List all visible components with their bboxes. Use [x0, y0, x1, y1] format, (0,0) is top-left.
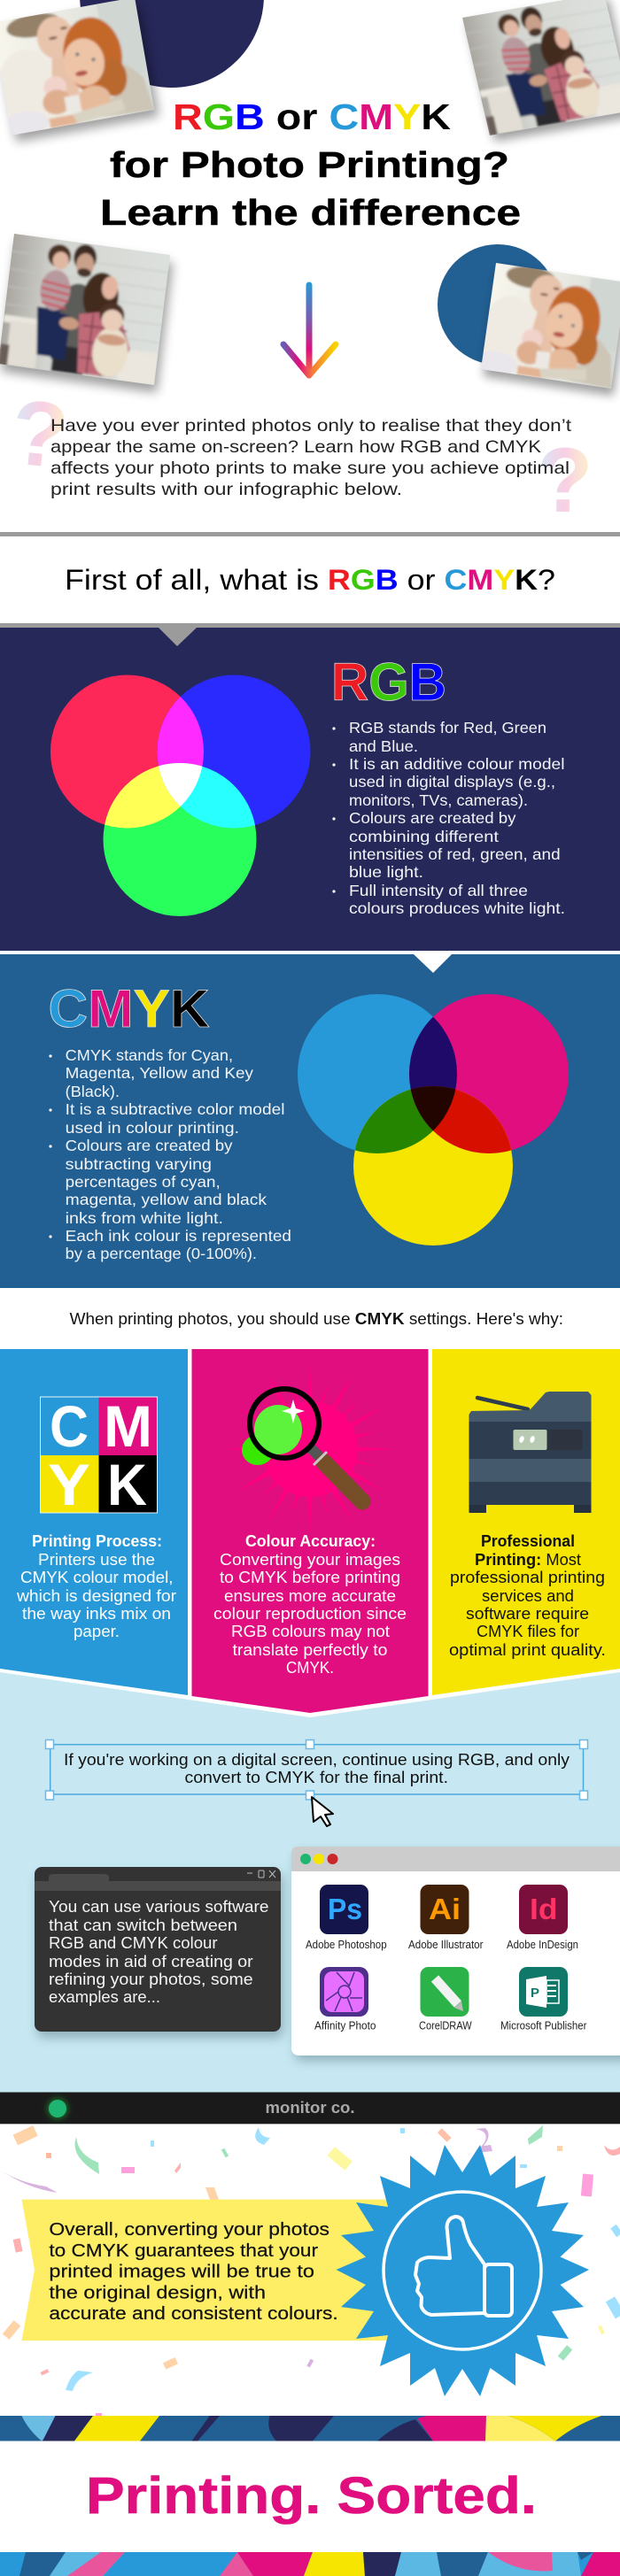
text: colour accuracy	[213, 1532, 407, 1677]
intro paragraph: Have you ever printed photos only to realise that they don’t	[50, 416, 572, 436]
icon: CMYK tile: Y	[48, 1452, 90, 1517]
text: professional printing: optimal print quality.	[449, 1641, 606, 1659]
icon: Adobe Illustrator: Ai	[429, 1893, 461, 1925]
text: printing process: the way inks mix on	[22, 1605, 171, 1623]
CMYK bullet list: Each ink colour is represented	[66, 1227, 291, 1245]
icon: Adobe Illustrator	[420, 1885, 469, 1934]
closing slogan: Printing. Sorted.	[86, 2467, 537, 2525]
RGB bullet list: and Blue.	[349, 737, 418, 755]
callout: selection box with digital screen note: If you're working on a digital screen, continue using RGB, and only	[64, 1751, 570, 1769]
RGB bullet list	[332, 719, 565, 917]
text: printing process: which is designed for	[16, 1587, 176, 1605]
icon: CMYK tile: K	[107, 1452, 147, 1517]
callout: selection box with digital screen note: convert to CMYK for the final print.	[184, 1769, 448, 1786]
text: software intro: RGB and CMYK colour	[49, 1934, 218, 1952]
text: conclusion: accurate and consistent colours.	[49, 2304, 338, 2324]
text: colour accuracy: to CMYK before printing	[220, 1569, 400, 1586]
photo: mother and daughter, right	[470, 259, 620, 396]
text: professional printing: Professional	[481, 1532, 575, 1550]
colour band bottom	[0, 2552, 620, 2576]
CMYK bullet list: CMYK stands for Cyan,	[66, 1046, 233, 1064]
CMYK bullet list: percentages of cyan,	[66, 1173, 221, 1191]
icon: window controls	[247, 1870, 275, 1878]
callout: selection box with digital screen note	[46, 1740, 588, 1800]
confetti	[0, 2125, 620, 2416]
text: conclusion: to CMYK guarantees that your	[49, 2241, 318, 2261]
title: RGB or CMYK	[173, 96, 451, 137]
RGB bullet list: used in digital displays (e.g.,	[349, 773, 555, 791]
CMYK bullet list: used in colour printing.	[66, 1119, 239, 1137]
text: conclusion: the original design, with	[49, 2284, 266, 2303]
text: printing process: Printers use the	[38, 1551, 155, 1569]
CMYK bullet list: Colours are created by	[66, 1137, 233, 1154]
text: colour accuracy: CMYK.	[286, 1659, 334, 1677]
heading: CMYK: CMYK	[48, 979, 209, 1038]
chart: additive RGB venn	[50, 675, 310, 916]
photo: mother and daughter, top left	[0, 0, 159, 144]
text: professional printing: professional printing	[450, 1569, 605, 1586]
CMYK bullet list: by a percentage (0-100%).	[66, 1245, 257, 1262]
icon: pale question mark left: ?	[6, 381, 73, 489]
heading: RGB: RGB	[331, 652, 446, 712]
text: professional printing: software require	[466, 1605, 589, 1623]
panel: light blue software background	[0, 1672, 620, 2093]
CMYK bullet list: magenta, yellow and black	[66, 1191, 267, 1208]
text: colour accuracy: ensures more accurate	[224, 1587, 396, 1605]
monitor bezel bar	[0, 2093, 620, 2125]
text: professional printing	[449, 1532, 606, 1659]
icon: thumbs up in ring	[384, 2192, 541, 2349]
RGB bullet list: blue light.	[349, 863, 423, 881]
text: colour accuracy: RGB colours may not	[231, 1623, 390, 1640]
app labels: CorelDRAW	[419, 2020, 472, 2032]
intro paragraph: appear the same on-screen? Learn how RGB and CMYK	[50, 437, 541, 457]
pointer triangle	[159, 628, 197, 646]
decorative blue circle	[438, 244, 558, 365]
app labels: Adobe Illustrator	[408, 1939, 484, 1951]
text: conclusion: printed images will be true to	[49, 2263, 314, 2282]
text: professional printing: services and	[482, 1587, 574, 1605]
heading: first of all: First of all, what is RGB or CMYK?	[65, 564, 555, 596]
app labels: Adobe InDesign	[507, 1939, 578, 1951]
icon: CMYK tile: C	[50, 1393, 89, 1459]
text: software intro	[49, 1898, 269, 2006]
title: Learn the difference	[100, 192, 521, 233]
icon: office printer	[469, 1392, 592, 1513]
panel: dark window	[35, 1867, 283, 2038]
CMYK bullet list: It is a subtractive color model	[66, 1100, 285, 1118]
text: professional printing: CMYK files for	[477, 1623, 579, 1640]
app labels: Affinity Photo	[314, 2020, 376, 2032]
photo: family, left	[0, 231, 174, 392]
text: printing process: Printing Process:	[32, 1532, 162, 1550]
text: printing process: CMYK colour model,	[20, 1569, 174, 1586]
text: colour accuracy: Colour Accuracy:	[245, 1532, 376, 1550]
icon: Affinity Photo	[320, 1967, 368, 2017]
RGB bullet list: Full intensity of all three	[349, 882, 528, 899]
panel: RGB	[0, 623, 620, 951]
RGB bullet list: colours produces white light.	[349, 899, 565, 917]
arrow: gradient down arrow	[283, 285, 336, 375]
colour band top	[0, 2416, 620, 2441]
intro paragraph: print results with our infographic below.	[50, 480, 402, 499]
text: colour accuracy: colour reproduction since	[213, 1605, 407, 1623]
RGB bullet list: RGB stands for Red, Green	[349, 719, 546, 737]
text: printing process: paper.	[74, 1623, 120, 1640]
icon: CMYK tile: M	[104, 1393, 152, 1459]
icon: CMYK tile	[41, 1393, 158, 1517]
panel: software app window	[291, 1847, 620, 2061]
section: conclusion	[0, 2125, 620, 2416]
text: software intro: refining your photos, some	[49, 1971, 253, 1988]
CMYK bullet list: Magenta, Yellow and Key	[66, 1064, 253, 1082]
app labels: Adobe Photoshop	[306, 1939, 387, 1951]
text: software intro: You can use various software	[49, 1898, 269, 1916]
text: colour accuracy: Converting your images	[220, 1551, 400, 1569]
icon: pale question mark right: ?	[537, 429, 593, 532]
yellow banner	[21, 2200, 399, 2341]
intro paragraph	[50, 416, 572, 499]
power LED	[48, 2099, 67, 2118]
icon: CorelDRAW	[420, 1967, 469, 2017]
section: intro header	[0, 0, 620, 532]
CMYK bullet list: inks from white light.	[66, 1209, 223, 1227]
title	[100, 96, 521, 233]
text: printing process	[16, 1532, 176, 1640]
icon: Adobe InDesign	[519, 1885, 568, 1934]
text: professional printing: Printing: Most	[475, 1551, 581, 1569]
blue starburst badge	[337, 2145, 589, 2396]
panel: printing process column	[0, 1349, 188, 1695]
text: conclusion	[49, 2220, 338, 2324]
intro paragraph: affects your photo prints to make sure you achieve optimal	[50, 459, 570, 478]
app labels: Microsoft Publisher	[500, 2020, 586, 2032]
divider bar top	[0, 532, 620, 536]
photo: family, top right	[460, 0, 620, 143]
window dots	[300, 1854, 338, 1864]
RGB bullet list: intensities of red, green, and	[349, 845, 561, 863]
panel: professional printing column	[432, 1349, 620, 1695]
icon: Microsoft Publisher	[519, 1967, 568, 2017]
icon: magnifying glass with burst	[225, 1364, 395, 1534]
icon: Adobe Photoshop	[320, 1885, 368, 1934]
text: software intro: examples are...	[49, 1988, 160, 2006]
CMYK bullet list	[49, 1046, 291, 1262]
monitor brand: monitor co.	[266, 2099, 354, 2117]
icon: mouse cursor	[312, 1797, 333, 1826]
icon: Adobe Photoshop: Ps	[328, 1893, 362, 1925]
text: when printing photos: When printing photos, you should use CMYK settings. Here's why:	[70, 1309, 563, 1328]
text: conclusion: Overall, converting your photos	[49, 2220, 329, 2240]
RGB bullet list: monitors, TVs, cameras).	[349, 791, 528, 809]
CMYK bullet list: subtracting varying	[66, 1155, 212, 1173]
decorative navy circle	[80, 0, 264, 88]
app labels	[306, 1939, 586, 2032]
pointer triangle	[414, 954, 452, 973]
icon: Microsoft Publisher: P	[531, 1986, 539, 2001]
RGB bullet list: Colours are created by	[349, 809, 516, 827]
panel: CMYK	[0, 954, 620, 1288]
CMYK bullet list: (Black).	[66, 1083, 120, 1100]
RGB bullet list: It is an additive colour model	[349, 755, 565, 773]
panel: colour accuracy column	[191, 1349, 429, 1713]
icon: Adobe InDesign: Id	[530, 1893, 558, 1925]
RGB bullet list: combining different	[349, 828, 499, 845]
text: software intro: that can switch between	[49, 1917, 237, 1934]
chart: subtractive CMY venn	[298, 994, 569, 1246]
title: for Photo Printing?	[110, 144, 509, 185]
text: colour accuracy: translate perfectly to	[232, 1641, 388, 1659]
text: software intro: modes in aid of creating or	[49, 1953, 253, 1971]
